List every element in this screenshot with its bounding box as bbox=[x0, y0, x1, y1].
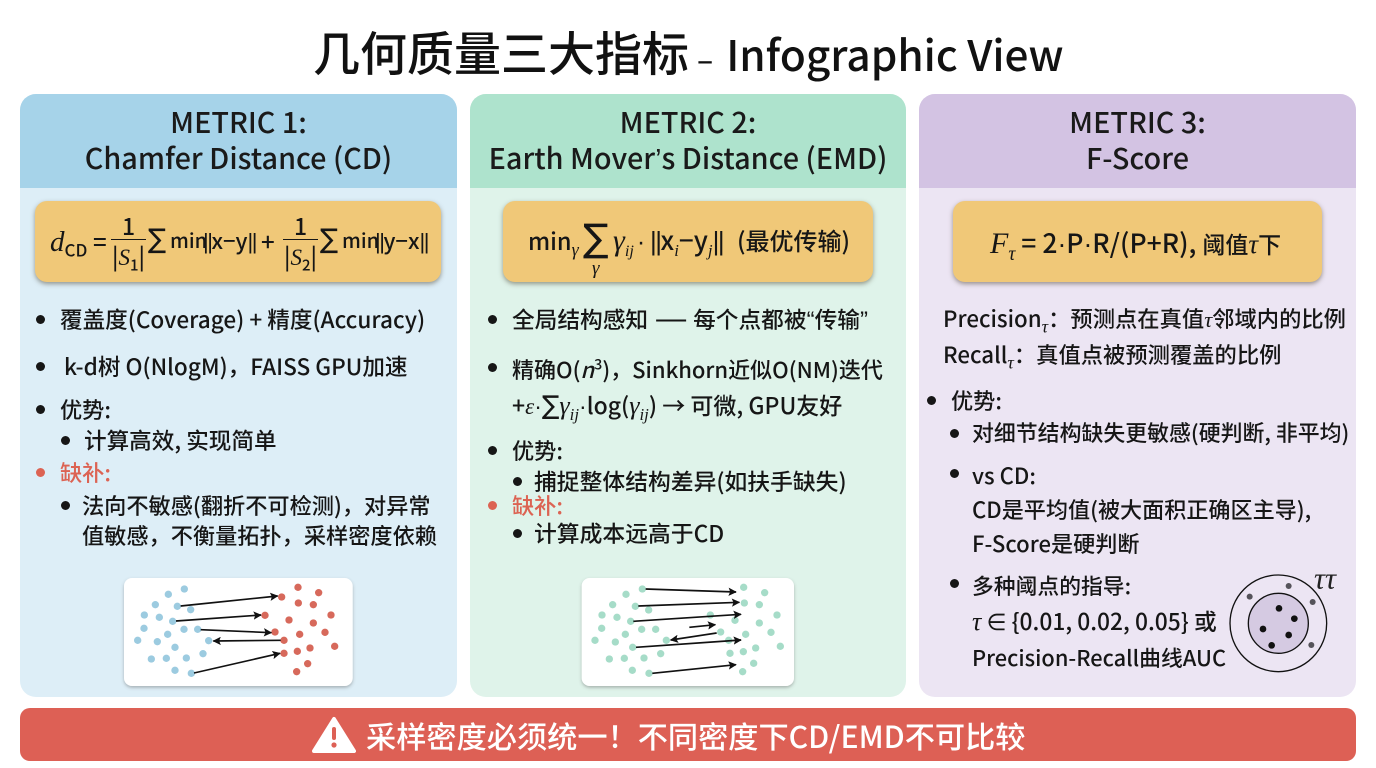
panel heading: metric 1: METRIC 1: bbox=[170, 101, 307, 142]
diagram: nearest-neighbour matching between point sets bbox=[122, 578, 354, 690]
formula box: Chamfer distance: min bbox=[342, 225, 379, 254]
bullet: drawbacks: 缺补: bbox=[60, 456, 111, 488]
formula box: Chamfer distance bbox=[35, 201, 441, 282]
diagram: optimal transport between point sets bbox=[580, 578, 796, 690]
bullet: drawbacks bbox=[488, 489, 563, 521]
formula box: F-score: Fτ = 2·P·R/(P+R), 阈值τ下 bbox=[990, 222, 1281, 265]
formula box: Chamfer distance: + bbox=[261, 223, 275, 258]
sub-bullet: drawbacks detail bbox=[61, 489, 437, 551]
formula box: optimal transport bbox=[503, 201, 873, 282]
sub-bullet: versus CD: vs CD: bbox=[972, 459, 1036, 491]
formula box: Chamfer distance: = bbox=[93, 223, 107, 258]
panel heading: metric 3: F-Score bbox=[1086, 137, 1189, 178]
panel: Chamfer Distance bbox=[20, 94, 457, 697]
bullet: complexity: 精确O(n3)，Sinkhorn近似O(NM)迭代 bbox=[512, 353, 883, 385]
sub-bullet: cost: 计算成本远高于CD bbox=[534, 516, 724, 549]
formula box: optimal transport: minγ bbox=[528, 223, 579, 260]
panel heading: metric 2: METRIC 2: bbox=[620, 101, 756, 142]
sub-bullet: versus CD bbox=[950, 459, 1311, 559]
formula box: optimal transport: ||xi−yj|| bbox=[650, 221, 723, 260]
bullet: drawbacks: 缺补: bbox=[512, 489, 563, 521]
sub-bullet: versus CD: F-Score是硬判断 bbox=[972, 527, 1139, 559]
formula box: Chamfer distance: ∑ bbox=[148, 224, 166, 255]
title: 几何质量三大指标 – Infographic View bbox=[313, 16, 1064, 85]
sub-bullet: sensitivity: 对细节结构缺失更敏感(硬判断, 非平均) bbox=[972, 417, 1349, 448]
panel heading: metric 1: Chamfer Distance (CD) bbox=[85, 137, 392, 178]
text: precision and recall definitions: Recallτ：真值点被预测覆盖的比例 bbox=[943, 338, 1281, 372]
formula box: Chamfer distance: ||y−x|| bbox=[375, 224, 428, 256]
sub-bullet: multiple thresholds: 多种阈点的指导: bbox=[972, 570, 1131, 601]
formula box: Chamfer distance: dCD bbox=[50, 226, 87, 261]
icon: warning triangle bbox=[312, 716, 356, 753]
formula box: F-score bbox=[953, 201, 1322, 282]
bullet: coverage and accuracy: 覆盖度(Coverage) + 精度(Accuracy) bbox=[60, 302, 425, 335]
panel heading: metric 1 bbox=[20, 94, 457, 188]
bullet: advantages: 优势: bbox=[60, 393, 111, 425]
diagram: threshold circles bbox=[1229, 561, 1337, 672]
formula box: Chamfer distance: ||x−y|| bbox=[203, 224, 256, 256]
panel heading: metric 2: Earth Mover’s Distance (EMD) bbox=[489, 137, 887, 178]
formula box: optimal transport: (最优传输) bbox=[737, 222, 850, 257]
bullet: complexity: k-d树 O(NlogM)，FAISS GPU加速 bbox=[64, 349, 408, 382]
banner text: 采样密度必须统一！不同密度下CD/EMD不可比较 bbox=[366, 713, 1025, 757]
sub-bullet: multiple thresholds bbox=[950, 570, 1226, 673]
sub-bullet: drawbacks detail: 法向不敏感(翻折不可检测)，对异常 bbox=[82, 489, 431, 521]
bullet: advantages bbox=[927, 384, 1002, 416]
panel: Earth Mover's Distance bbox=[470, 94, 906, 697]
panel heading: metric 3: METRIC 3: bbox=[1069, 101, 1206, 142]
warning banner bbox=[20, 708, 1356, 761]
panel: F-Score bbox=[919, 94, 1356, 697]
sub-bullet: efficient: 计算高效, 实现简单 bbox=[84, 423, 277, 456]
sub-bullet: multiple thresholds: τ ∈ {0.01, 0.02, 0.05} 或 bbox=[972, 604, 1217, 637]
bullet: advantages: 优势: bbox=[512, 434, 563, 466]
formula box: optimal transport: γij· bbox=[613, 224, 645, 260]
bullet: complexity bbox=[488, 353, 883, 424]
sub-bullet: captures structure: 捕捉整体结构差异(如扶手缺失) bbox=[534, 464, 847, 497]
formula box: Chamfer distance: |S2| bbox=[284, 238, 317, 276]
bullet: complexity: +ε·∑γij·log(γij) → 可微, GPU友好 bbox=[512, 387, 842, 424]
formula box: Chamfer distance: min bbox=[170, 225, 207, 254]
formula box: Chamfer distance: 1 bbox=[294, 208, 307, 242]
bullet: drawbacks bbox=[36, 456, 111, 488]
formula box: Chamfer distance: 1 bbox=[122, 208, 135, 242]
diagram: threshold circles: ττ bbox=[1314, 561, 1337, 595]
text: precision and recall definitions bbox=[943, 302, 1346, 372]
formula box: optimal transport: γ bbox=[592, 258, 600, 279]
formula box: optimal transport: ∑ bbox=[583, 216, 609, 260]
bullet: advantages: 优势: bbox=[951, 384, 1002, 416]
formula box: Chamfer distance: ∑ bbox=[320, 224, 338, 255]
bullet: advantages bbox=[36, 393, 111, 425]
sub-bullet: drawbacks detail: 值敏感，不衡量拓扑，采样密度依赖 bbox=[82, 519, 437, 551]
bullet: advantages bbox=[488, 434, 563, 466]
formula box: Chamfer distance: |S1| bbox=[112, 238, 145, 276]
bullet: global structure: 全局结构感知 — 每个点都被“传输” bbox=[512, 302, 868, 335]
sub-bullet: versus CD: CD是平均值(被大面积正确区主导), bbox=[972, 493, 1311, 525]
text: precision and recall definitions: Precisionτ：预测点在真值τ邻域内的比例 bbox=[943, 302, 1346, 336]
sub-bullet: multiple thresholds: Precision-Recall曲线AUC bbox=[972, 642, 1226, 673]
panel heading: metric 3 bbox=[919, 94, 1356, 188]
panel heading: metric 2 bbox=[470, 94, 906, 188]
